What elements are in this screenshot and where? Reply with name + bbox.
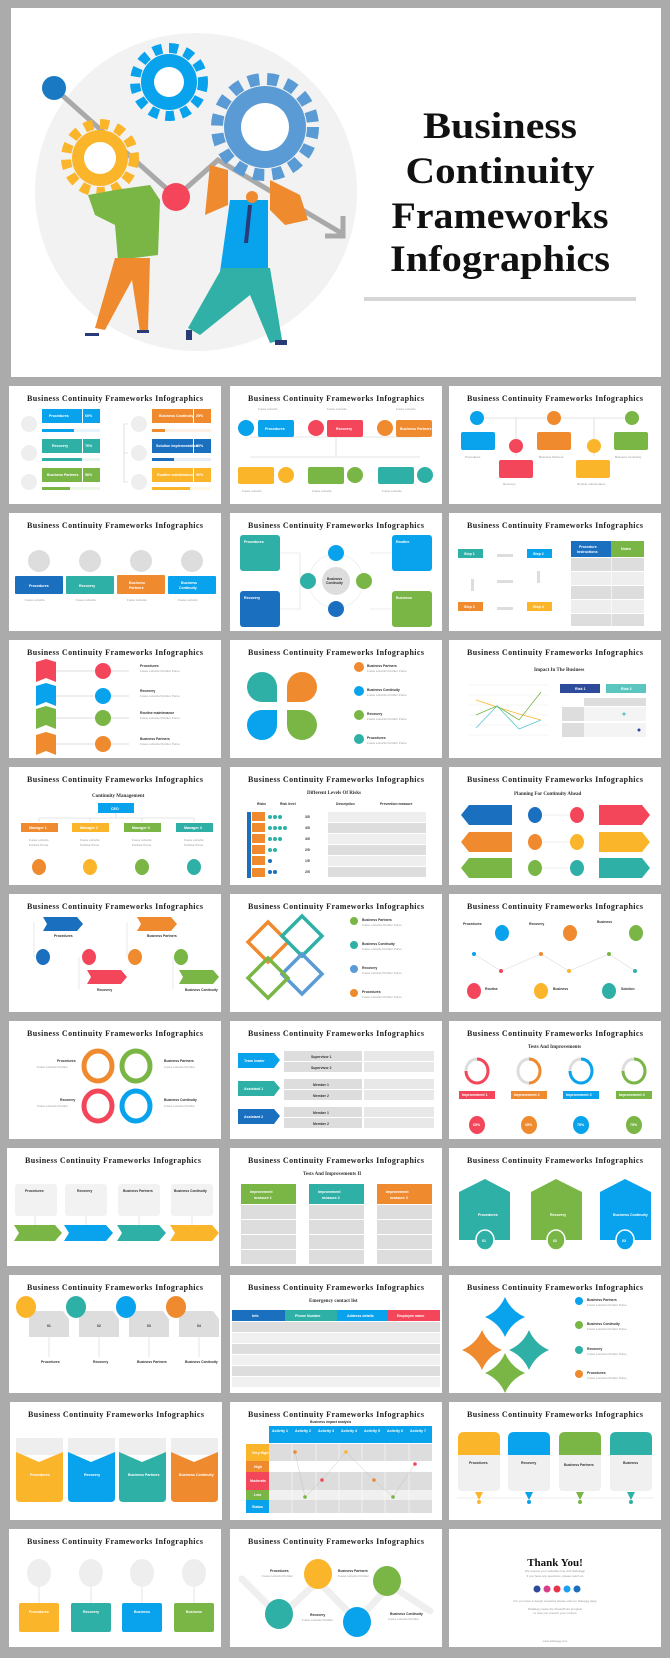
thumb 4: four gray circles: Fusce Lobortis <box>127 598 147 602</box>
thumb 6: steps and table: Step 2 <box>533 552 544 556</box>
thumb 1: progress bars: Business Continuity Frameworks Infographics <box>27 394 203 403</box>
thumb 30: thank you: We respect your valuable time with SlideEgg! <box>525 1569 585 1573</box>
person green <box>85 185 160 336</box>
thumb 25: notched cards: Business Continuity <box>179 1473 214 1477</box>
thumb 15: zigzag timeline: Business <box>553 987 568 991</box>
thumb 11: risk table: Prevention measure <box>380 802 413 806</box>
thumb 14: diamonds: Business Continuity Frameworks Infographics <box>248 902 424 911</box>
thumb 7: ribbons: Fusce Lobortis Porttitor Purus <box>140 716 180 720</box>
thumb 23: emergency contact list <box>230 1275 442 1393</box>
thumb 18: tests and improvements: 75% <box>630 1123 638 1127</box>
thumb 6: steps and table <box>449 513 661 631</box>
thumb 17: team table: Member 1 <box>313 1111 329 1115</box>
thumb 10: org chart: Fusce Lobortis <box>80 838 100 842</box>
thumb 17: team table: Member 1 <box>313 1083 329 1087</box>
thumb 18: tests and improvements: Improvement 2 <box>514 1093 540 1097</box>
thumb 5: hub: Routine <box>396 540 409 544</box>
thumb 19: cards with chevrons: Recovery <box>77 1189 92 1193</box>
thumb 8: petals: Fusce Lobortis Porttitor Purus <box>367 669 407 673</box>
thumb 28: circles with boxes: Recovery <box>83 1610 99 1614</box>
thumb 11: risk table: 3/5 <box>305 837 310 841</box>
thumb 16: rings: Fusce Lobortis Porttitor <box>37 1065 68 1069</box>
thumb 4: four gray circles: Fusce Lobortis <box>25 598 45 602</box>
thumb 14: diamonds: Procedures <box>362 990 381 994</box>
thumb 26: business impact analysis: Business Continuity Frameworks Infographics <box>248 1410 424 1419</box>
thumb 14: diamonds: Fusce Lobortis Porttitor Purus <box>362 971 402 975</box>
hero title: Frameworks <box>392 196 608 237</box>
thumb 24: star shapes: Fusce Lobortis Porttitor Purus <box>587 1376 627 1380</box>
thumb 10: org chart: Fusce Lobortis <box>29 838 49 842</box>
thumb 29: zigzag circles <box>230 1529 442 1647</box>
thumb 23: emergency contact list: Phone Number <box>295 1314 321 1318</box>
thumb 6: steps and table: Instructions <box>577 550 598 554</box>
thumb 4: four gray circles: Fusce Lobortis <box>76 598 96 602</box>
thumb 5: hub <box>230 513 442 631</box>
thumb 14: diamonds: Fusce Lobortis Porttitor Purus <box>362 923 402 927</box>
thumb 7: ribbons: Business Partners <box>140 737 170 741</box>
thumb 10: org chart <box>9 767 221 885</box>
thumb 1: progress bars: Procedures <box>49 414 69 418</box>
thumb 8: petals: Fusce Lobortis Porttitor Purus <box>367 693 407 697</box>
thumb 29: zigzag circles: Fusce Lobortis Porttitor <box>338 1574 369 1578</box>
thumb 2: six steps: Fusce Lobortis <box>327 407 347 411</box>
thumb 17: team table: Business Continuity Frameworks Infographics <box>248 1029 424 1038</box>
hero title: Business <box>423 106 577 147</box>
thumb 27: pin cards: Business Continuity Frameworks Infographics <box>467 1410 643 1419</box>
thumb 4: four gray circles: Partners <box>129 586 144 590</box>
thumb 22: numbered tabs: Business Partners <box>137 1360 167 1364</box>
thumb 23: emergency contact list: Info <box>252 1314 259 1318</box>
thumb 3: five numbered: Recovery <box>503 482 516 486</box>
thumb 2: six steps <box>230 386 442 504</box>
thumb 24: star shapes: Business Continuity <box>587 1322 620 1326</box>
thumb 1: progress bars: 30% <box>196 444 204 448</box>
gear yellow <box>66 124 134 192</box>
thumb 8: petals: Fusce Lobortis Porttitor Purus <box>367 741 407 745</box>
thumb 10: org chart: Manager 1 <box>29 826 47 830</box>
thumb 11: risk table: 3/5 <box>305 815 310 819</box>
thumb 17: team table: Team leader <box>244 1059 265 1063</box>
thumb 8: petals: Fusce Lobortis Porttitor Purus <box>367 717 407 721</box>
thumb 22: numbered tabs: Business Continuity <box>185 1360 218 1364</box>
thumb 18: tests and improvements: 65% <box>473 1123 481 1127</box>
thumb 4: four gray circles: Fusce Lobortis <box>178 598 198 602</box>
thumb 3: five numbered: Procedures <box>465 455 481 459</box>
thumb 21: house shapes: Business Continuity Frameworks Infographics <box>467 1156 643 1165</box>
thumb 8: petals: Business Continuity Frameworks Infographics <box>248 648 424 657</box>
thumb 19: cards with chevrons: Business Continuity <box>174 1189 207 1193</box>
thumb 16: rings: Business Continuity <box>164 1098 197 1102</box>
thumb 8: petals: Business Continuity <box>367 688 400 692</box>
thumb 12: planning arrows <box>449 767 661 885</box>
thumb 14: diamonds: Recovery <box>362 966 377 970</box>
thumb 11: risk table: Business Continuity Frameworks Infographics <box>248 775 424 784</box>
thumb 23: emergency contact list: Emergency contact list <box>309 1299 358 1304</box>
thumb 17: team table: Assistant 1 <box>244 1087 263 1091</box>
gear blue small <box>135 48 203 116</box>
thumb 26: business impact analysis: Activity 2 <box>295 1429 311 1433</box>
thumb 22: numbered tabs: Procedures <box>41 1360 60 1364</box>
thumb 25: notched cards: Recovery <box>84 1473 100 1477</box>
thumb 27: pin cards: Recovery <box>521 1461 536 1465</box>
thumb 28: circles with boxes: Business <box>186 1610 202 1614</box>
thumb 7: ribbons: Procedures <box>140 664 159 668</box>
thumb 14: diamonds <box>230 894 442 1012</box>
thumb 17: team table: Member 2 <box>313 1094 329 1098</box>
thumb 15: zigzag timeline: Procedures <box>463 922 482 926</box>
thumb 1: progress bars: Solution Implementation <box>156 444 198 448</box>
thumb 24: star shapes: Fusce Lobortis Porttitor Purus <box>587 1327 627 1331</box>
thumb 13: chevron flow: Business Continuity Frameworks Infographics <box>27 902 203 911</box>
thumb 5: hub: Continuity <box>326 581 343 585</box>
thumb 11: risk table: Risks <box>257 802 266 806</box>
thumb 14: diamonds: Fusce Lobortis Porttitor Purus <box>362 947 402 951</box>
thumb 27: pin cards: Business <box>623 1461 638 1465</box>
thumb 6: steps and table: Step 4 <box>533 605 544 609</box>
thumb 1: progress bars: Business Continuity <box>159 414 194 418</box>
thumb 12: planning arrows: Business Continuity Frameworks Infographics <box>467 775 643 784</box>
thumb 21: house shapes <box>449 1148 661 1266</box>
thumb 1: progress bars: 76% <box>85 444 93 448</box>
thumb 5: hub: Recovery <box>244 596 260 600</box>
thumb 2: six steps: Fusce Lobortis <box>312 489 332 493</box>
hero illustration <box>35 33 357 351</box>
thumb 24: star shapes: Fusce Lobortis Porttitor Purus <box>587 1303 627 1307</box>
thumb 26: business impact analysis: Moderate <box>250 1479 266 1483</box>
thumb 1: progress bars: Recovery <box>52 444 68 448</box>
thumb 26: business impact analysis: Activity 3 <box>318 1429 334 1433</box>
thumb 15: zigzag timeline: Solution <box>621 987 635 991</box>
thumb 4: four gray circles: Business Continuity Frameworks Infographics <box>27 521 203 530</box>
thumb 2: six steps: Recovery <box>336 427 352 431</box>
thumb 21: house shapes: Business Continuity <box>613 1213 648 1217</box>
thumb 17: team table: Supervisor 2 <box>311 1066 332 1070</box>
thumb 10: org chart: Manager 3 <box>132 826 150 830</box>
thumb 2: six steps: Business Continuity Frameworks Infographics <box>248 394 424 403</box>
thumb 10: org chart: Fusce Lobortis <box>184 838 204 842</box>
thumb 14: diamonds: Fusce Lobortis Porttitor Purus <box>362 995 402 999</box>
thumb 16: rings: Fusce Lobortis Porttitor <box>164 1104 195 1108</box>
thumb 24: star shapes: Business Continuity Frameworks Infographics <box>467 1283 643 1292</box>
thumb 30: thank you: Thank You! <box>527 1557 583 1569</box>
thumb 18: tests and improvements: 75% <box>577 1123 585 1127</box>
thumb 27: pin cards <box>449 1402 661 1520</box>
thumb 8: petals: Recovery <box>367 712 382 716</box>
thumb 6: steps and table: Step 1 <box>464 552 475 556</box>
thumb 18: tests and improvements: Improvement 3 <box>566 1093 592 1097</box>
thumb 26: business impact analysis: Low <box>254 1493 261 1497</box>
thumb 6: steps and table: Procedure <box>579 545 597 549</box>
hero title: Continuity <box>406 151 595 192</box>
thumb 15: zigzag timeline: Recovery <box>529 922 544 926</box>
thumb 10: org chart: Porttitor Purus <box>132 843 152 847</box>
thumb 4: four gray circles: Business <box>181 581 197 585</box>
thumb 16: rings <box>9 1021 221 1139</box>
thumb 17: team table: Member 2 <box>313 1122 329 1126</box>
thumb 4: four gray circles <box>9 513 221 631</box>
thumb 21: house shapes: 02 <box>553 1239 557 1243</box>
thumb 26: business impact analysis: Activity 1 <box>272 1429 288 1433</box>
thumb 11: risk table: 2/5 <box>305 870 310 874</box>
thumb 25: notched cards <box>10 1402 222 1520</box>
thumb 1: progress bars: 25% <box>196 414 204 418</box>
thumb 5: hub: Procedures <box>244 540 264 544</box>
thumb 13: chevron flow: Recovery <box>97 988 112 992</box>
thumb 1: progress bars <box>9 386 221 504</box>
thumb 5: hub: Business <box>396 596 412 600</box>
thumb 29: zigzag circles: Fusce Lobortis Porttitor <box>262 1574 293 1578</box>
thumb 10: org chart: Porttitor Purus <box>184 843 204 847</box>
thumb 13: chevron flow: Business Continuity <box>185 988 218 992</box>
thumb 25: notched cards: Business Continuity Frameworks Infographics <box>28 1410 204 1419</box>
thumb 9: line chart: Business Continuity Frameworks Infographics <box>467 648 643 657</box>
thumb 3: five numbered: Business Partners <box>539 455 564 459</box>
gear big <box>217 79 313 175</box>
thumb 10: org chart: Porttitor Purus <box>80 843 100 847</box>
thumb 29: zigzag circles: Business Partners <box>338 1569 368 1573</box>
thumb 5: hub: Business Continuity Frameworks Infographics <box>248 521 424 530</box>
thumb 10: org chart: Business Continuity Frameworks Infographics <box>27 775 203 784</box>
thumb 23: emergency contact list: Address details <box>347 1314 374 1318</box>
thumb 20: improvement columns: measure 3 <box>390 1196 408 1200</box>
thumb 24: star shapes: Recovery <box>587 1347 602 1351</box>
thumb 29: zigzag circles: Business Continuity <box>390 1612 423 1616</box>
thumb 30: thank you <box>449 1529 661 1647</box>
thumb 18: tests and improvements: Improvement 1 <box>462 1093 488 1097</box>
thumb 3: five numbered <box>449 386 661 504</box>
thumb 10: org chart: Porttitor Purus <box>29 843 49 847</box>
thumb 30: thank you: to help you present your content <box>534 1611 577 1615</box>
hero panel <box>11 8 661 377</box>
thumb 17: team table <box>230 1021 442 1139</box>
thumb 16: rings: Business Partners <box>164 1059 194 1063</box>
thumb 27: pin cards: Business Partners <box>564 1463 594 1467</box>
thumb 29: zigzag circles: Fusce Lobortis Porttitor <box>302 1618 333 1622</box>
thumb 11: risk table: Different Levels Of Risks <box>307 791 361 796</box>
thumb 29: zigzag circles: Recovery <box>310 1613 325 1617</box>
thumb 16: rings: Recovery <box>60 1098 75 1102</box>
thumb 21: house shapes: Procedures <box>478 1213 498 1217</box>
thumb 18: tests and improvements: Tests And Improvements <box>528 1045 581 1050</box>
thumb 26: business impact analysis: Activity 5 <box>364 1429 380 1433</box>
thumb 26: business impact analysis: Status <box>252 1505 263 1509</box>
thumb 4: four gray circles: Recovery <box>79 584 95 588</box>
thumb 11: risk table <box>230 767 442 885</box>
thumb 1: progress bars: 56% <box>85 473 93 477</box>
thumb 13: chevron flow: Business Partners <box>147 934 177 938</box>
thumb 20: improvement columns: Business Continuity Frameworks Infographics <box>248 1156 424 1165</box>
thumb 19: cards with chevrons: Business Partners <box>123 1189 153 1193</box>
thumb 20: improvement columns: Improvement <box>318 1190 341 1194</box>
thumb 6: steps and table: Notes <box>621 547 631 551</box>
thumb 21: house shapes: Recovery <box>550 1213 566 1217</box>
thumb 22: numbered tabs: Recovery <box>93 1360 108 1364</box>
thumb 18: tests and improvements <box>449 1021 661 1139</box>
thumb 23: emergency contact list: Business Continuity Frameworks Infographics <box>248 1283 424 1292</box>
thumb 26: business impact analysis: Activity 6 <box>387 1429 403 1433</box>
thumb 17: team table: Assistant 2 <box>244 1115 263 1119</box>
thumb 2: six steps: Fusce Lobortis <box>258 407 278 411</box>
hero title <box>390 106 610 280</box>
thumb 3: five numbered: Business Continuity Frameworks Infographics <box>467 394 643 403</box>
thumb 3: five numbered: Business Continuity <box>615 455 642 459</box>
thumb 20: improvement columns <box>230 1148 442 1266</box>
thumb 28: circles with boxes: Business <box>134 1610 150 1614</box>
thumb 30: thank you: For you have a design enquiries please visit our slideegg page <box>513 1599 597 1603</box>
thumb 16: rings: Business Continuity Frameworks Infographics <box>27 1029 203 1038</box>
thumb 27: pin cards: Procedures <box>469 1461 488 1465</box>
thumb 9: line chart: Risk 2 <box>621 687 632 691</box>
thumb 26: business impact analysis: Very High <box>252 1451 269 1455</box>
thumb 29: zigzag circles: Business Continuity Frameworks Infographics <box>248 1537 424 1546</box>
thumb 11: risk table: Description <box>336 802 355 806</box>
thumb 1: progress bars: Routine maintenance <box>157 473 193 477</box>
thumb 11: risk table: 2/5 <box>305 848 310 852</box>
thumb 22: numbered tabs: 04 <box>197 1324 201 1328</box>
thumb 10: org chart: CEO <box>111 807 119 811</box>
thumb 22: numbered tabs <box>9 1275 221 1393</box>
thumb 18: tests and improvements: Business Continuity Frameworks Infographics <box>467 1029 643 1038</box>
thumb 28: circles with boxes <box>9 1529 221 1647</box>
thumb 7: ribbons <box>9 640 221 758</box>
thumb 8: petals <box>230 640 442 758</box>
thumb 7: ribbons: Fusce Lobortis Porttitor Purus <box>140 694 180 698</box>
thumb 10: org chart: Fusce Lobortis <box>132 838 152 842</box>
thumb 10: org chart: Continuity Management <box>92 794 145 799</box>
thumb 20: improvement columns: Improvement <box>386 1190 409 1194</box>
thumb 20: improvement columns: Improvement <box>250 1190 273 1194</box>
thumb 29: zigzag circles: Fusce Lobortis Porttitor <box>388 1617 419 1621</box>
thumb 22: numbered tabs: 03 <box>147 1324 151 1328</box>
thumb 30: thank you: www.slideegg.com <box>543 1639 568 1643</box>
thumb 14: diamonds: Business Partners <box>362 918 392 922</box>
thumb 4: four gray circles: Procedures <box>29 584 49 588</box>
thumb 26: business impact analysis: High <box>254 1465 262 1469</box>
thumb 18: tests and improvements: Improvement 4 <box>619 1093 645 1097</box>
thumb 10: org chart: Manager 2 <box>80 826 98 830</box>
thumb 25: notched cards: Procedures <box>30 1473 50 1477</box>
thumb 7: ribbons: Business Continuity Frameworks Infographics <box>27 648 203 657</box>
thumb 22: numbered tabs: 01 <box>47 1324 51 1328</box>
thumb 17: team table: Supervisor 1 <box>311 1055 332 1059</box>
thumb 15: zigzag timeline: Business <box>597 920 612 924</box>
thumb 18: tests and improvements: 45% <box>525 1123 533 1127</box>
thumb 26: business impact analysis: Activity 4 <box>341 1429 357 1433</box>
thumb 10: org chart: Manager 4 <box>184 826 202 830</box>
thumb 1: progress bars: Business Partners <box>47 473 79 477</box>
thumb 15: zigzag timeline: Routine <box>485 987 498 991</box>
thumb 8: petals: Procedures <box>367 736 386 740</box>
thumb 22: numbered tabs: Business Continuity Frameworks Infographics <box>27 1283 203 1292</box>
thumb 4: four gray circles: Business <box>129 581 145 585</box>
thumb 15: zigzag timeline <box>449 894 661 1012</box>
thumb 7: ribbons: Fusce Lobortis Porttitor Purus <box>140 742 180 746</box>
thumb 26: business impact analysis <box>230 1402 442 1520</box>
thumb 8: petals: Business Partners <box>367 664 397 668</box>
thumb 24: star shapes <box>449 1275 661 1393</box>
thumb 9: line chart <box>449 640 661 758</box>
thumb 7: ribbons: Recovery <box>140 689 155 693</box>
thumb 24: star shapes: Fusce Lobortis Porttitor Purus <box>587 1352 627 1356</box>
thumb 11: risk table: 1/5 <box>305 859 310 863</box>
thumb 20: improvement columns: measure 1 <box>254 1196 272 1200</box>
thumb 9: line chart: Risk 1 <box>575 687 586 691</box>
thumb 6: steps and table: Business Continuity Frameworks Infographics <box>467 521 643 530</box>
thumb 12: planning arrows: Planning For Continuity Ahead <box>514 792 582 797</box>
thumb 30: thank you: If you have any questions, please reach us <box>527 1574 584 1578</box>
thumb 9: line chart: Impact In The Business <box>534 668 584 673</box>
thumb 14: diamonds: Business Continuity <box>362 942 395 946</box>
thumb 20: improvement columns: Tests And Improvements II <box>303 1172 361 1177</box>
thumb 13: chevron flow: Procedures <box>54 934 73 938</box>
thumb 24: star shapes: Business Partners <box>587 1298 617 1302</box>
thumb 16: rings: Procedures <box>57 1059 76 1063</box>
thumb 2: six steps: Fusce Lobortis <box>242 489 262 493</box>
thumb 29: zigzag circles: Procedures <box>270 1569 289 1573</box>
thumb 21: house shapes: 01 <box>482 1239 486 1243</box>
thumb 13: chevron flow <box>9 894 221 1012</box>
thumb 16: rings: Fusce Lobortis Porttitor <box>37 1104 68 1108</box>
thumb 1: progress bars: 60% <box>85 414 93 418</box>
thumb 15: zigzag timeline: Business Continuity Frameworks Infographics <box>467 902 643 911</box>
thumb 23: emergency contact list: Employee name <box>397 1314 424 1318</box>
thumb 11: risk table: 4/5 <box>305 826 310 830</box>
person blue <box>186 165 308 345</box>
thumb 3: five numbered: Routine maintenance <box>577 482 606 486</box>
thumb 16: rings: Fusce Lobortis Porttitor <box>164 1065 195 1069</box>
thumb 2: six steps: Procedures <box>265 427 285 431</box>
thumb 2: six steps: Business Partners <box>400 427 432 431</box>
thumb 7: ribbons: Fusce Lobortis Porttitor Purus <box>140 669 180 673</box>
thumb 24: star shapes: Procedures <box>587 1371 606 1375</box>
thumb 6: steps and table: Step 3 <box>464 605 475 609</box>
thumb 2: six steps: Fusce Lobortis <box>382 489 402 493</box>
thumb 26: business impact analysis: Activity 7 <box>410 1429 426 1433</box>
thumb 19: cards with chevrons: Business Continuity Frameworks Infographics <box>25 1156 201 1165</box>
thumb 28: circles with boxes: Procedures <box>29 1610 49 1614</box>
thumb 22: numbered tabs: 02 <box>97 1324 101 1328</box>
thumb 21: house shapes: 03 <box>622 1239 626 1243</box>
thumb 5: hub: Business <box>327 577 342 581</box>
thumb 11: risk table: Risk level <box>280 802 296 806</box>
thumb 4: four gray circles: Continuity <box>179 586 197 590</box>
thumb 7: ribbons: Routine maintenance <box>140 711 174 715</box>
thumb 2: six steps: Fusce Lobortis <box>396 407 416 411</box>
thumb 26: business impact analysis: Business impact analysis <box>310 1420 351 1424</box>
thumb 19: cards with chevrons: Procedures <box>25 1189 44 1193</box>
thumb 20: improvement columns: measure 2 <box>322 1196 340 1200</box>
hero title: Infographics <box>390 239 610 280</box>
thumb 25: notched cards: Business Partners <box>128 1473 160 1477</box>
thumb 28: circles with boxes: Business Continuity Frameworks Infographics <box>27 1537 203 1546</box>
thumb 19: cards with chevrons <box>7 1148 219 1266</box>
thumb 1: progress bars: 90% <box>196 473 204 477</box>
thumb 30: thank you: SlideEgg create the PowerPoint template <box>528 1607 583 1611</box>
